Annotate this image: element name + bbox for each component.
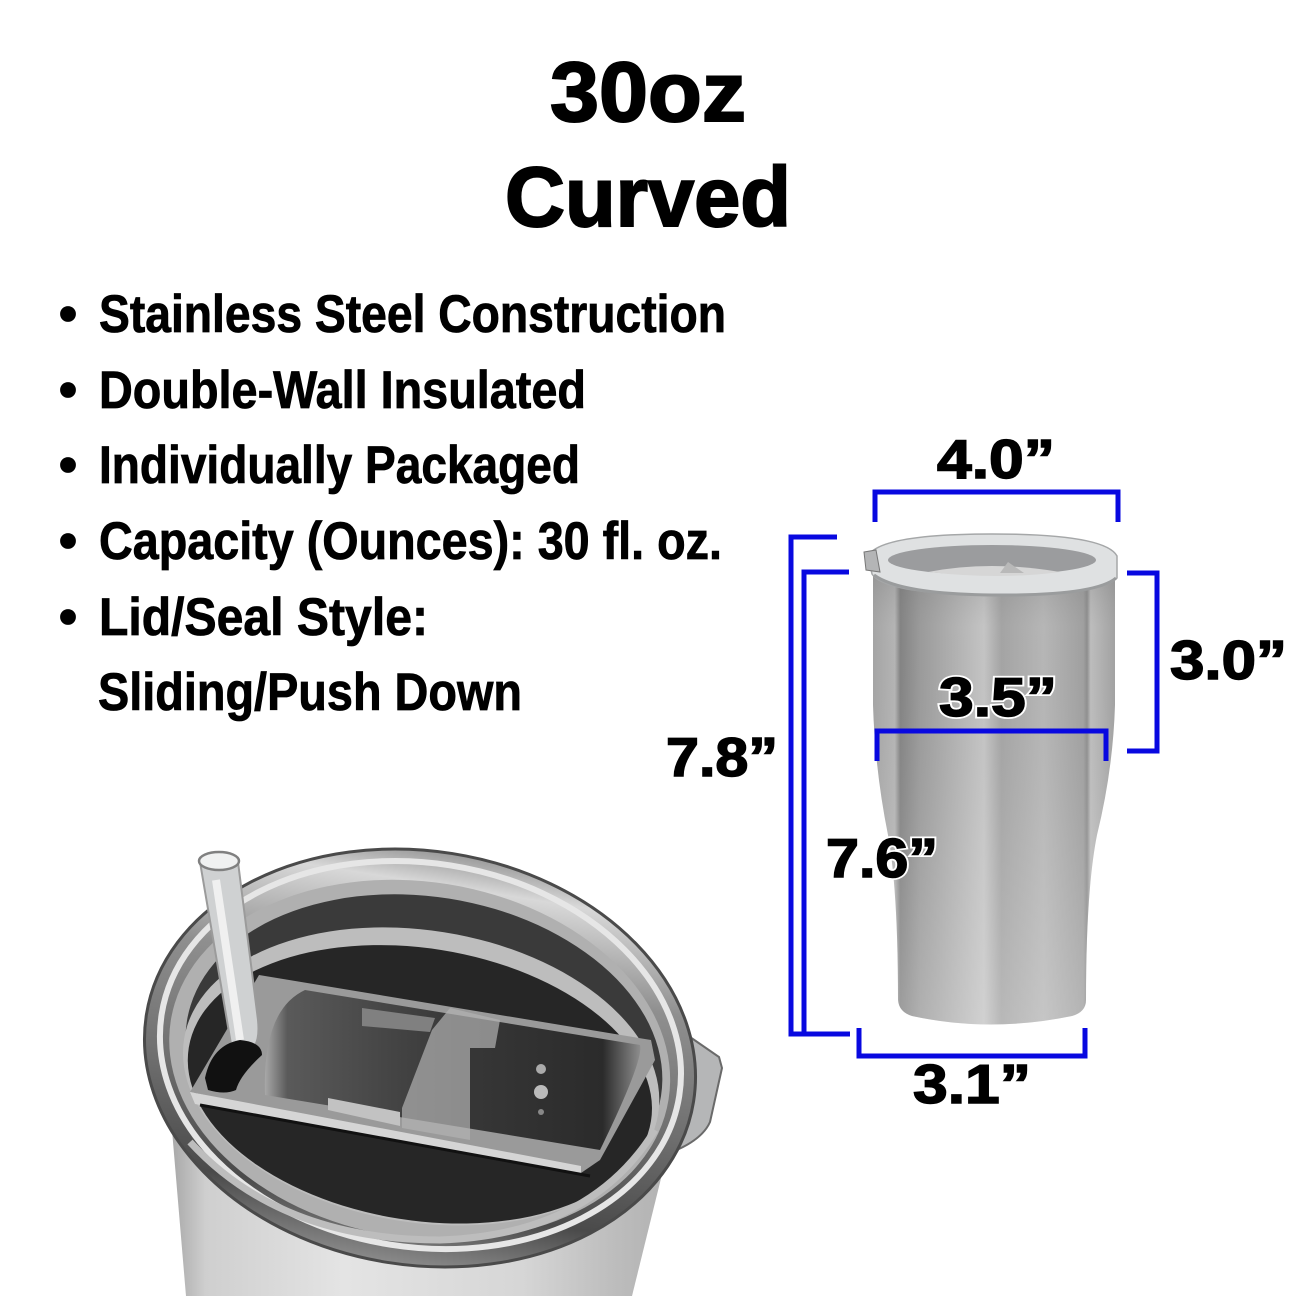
bullet: lid style: Sliding/Push Down: [98, 663, 522, 722]
cup body: [172, 1130, 668, 1296]
lid rim rings: [114, 810, 726, 1296]
dimension labels: 3.0”: [1170, 629, 1287, 691]
straw: [199, 852, 262, 1092]
brackets: [791, 492, 1157, 1056]
slider latch: [402, 1008, 500, 1140]
bullet: construction: Stainless Steel Construction: [99, 285, 726, 344]
bullet: packaging: Individually Packaged: [99, 436, 580, 495]
dimension labels: 3.1”: [913, 1053, 1031, 1115]
close-up photo of lid with straw: [114, 810, 726, 1296]
bullet: insulation: Double-Wall Insulated: [99, 361, 586, 420]
bullet: capacity: Capacity (Ounces): 30 fl. oz.: [99, 512, 722, 571]
slider assembly: [190, 975, 655, 1176]
dimension labels: [666, 428, 1287, 1115]
bullet: lid style: [60, 588, 522, 722]
label: 3.5 inch: 3.5”: [939, 666, 1057, 728]
title: [505, 45, 791, 244]
label: 7.6 inch: 7.6”: [826, 827, 938, 889]
dimension labels: 7.8”: [666, 726, 778, 788]
lid bottom highlight: [190, 1130, 655, 1240]
label: 7.6 inch: 7.6”: [826, 827, 938, 889]
dimension labels: 4.0”: [937, 428, 1055, 490]
vent holes: [536, 1064, 546, 1074]
bullet: lid style: Lid/Seal Style:: [99, 588, 428, 647]
feature list: [60, 285, 726, 722]
title: 30oz: [550, 45, 746, 139]
tumbler photo with dimensions: [666, 428, 1287, 1115]
lid tab: [655, 1037, 722, 1152]
tumbler lid: [864, 534, 1117, 595]
title: Curved: [505, 150, 791, 244]
label: 3.5 inch: 3.5”: [939, 666, 1057, 728]
tumbler body: [873, 572, 1115, 1024]
